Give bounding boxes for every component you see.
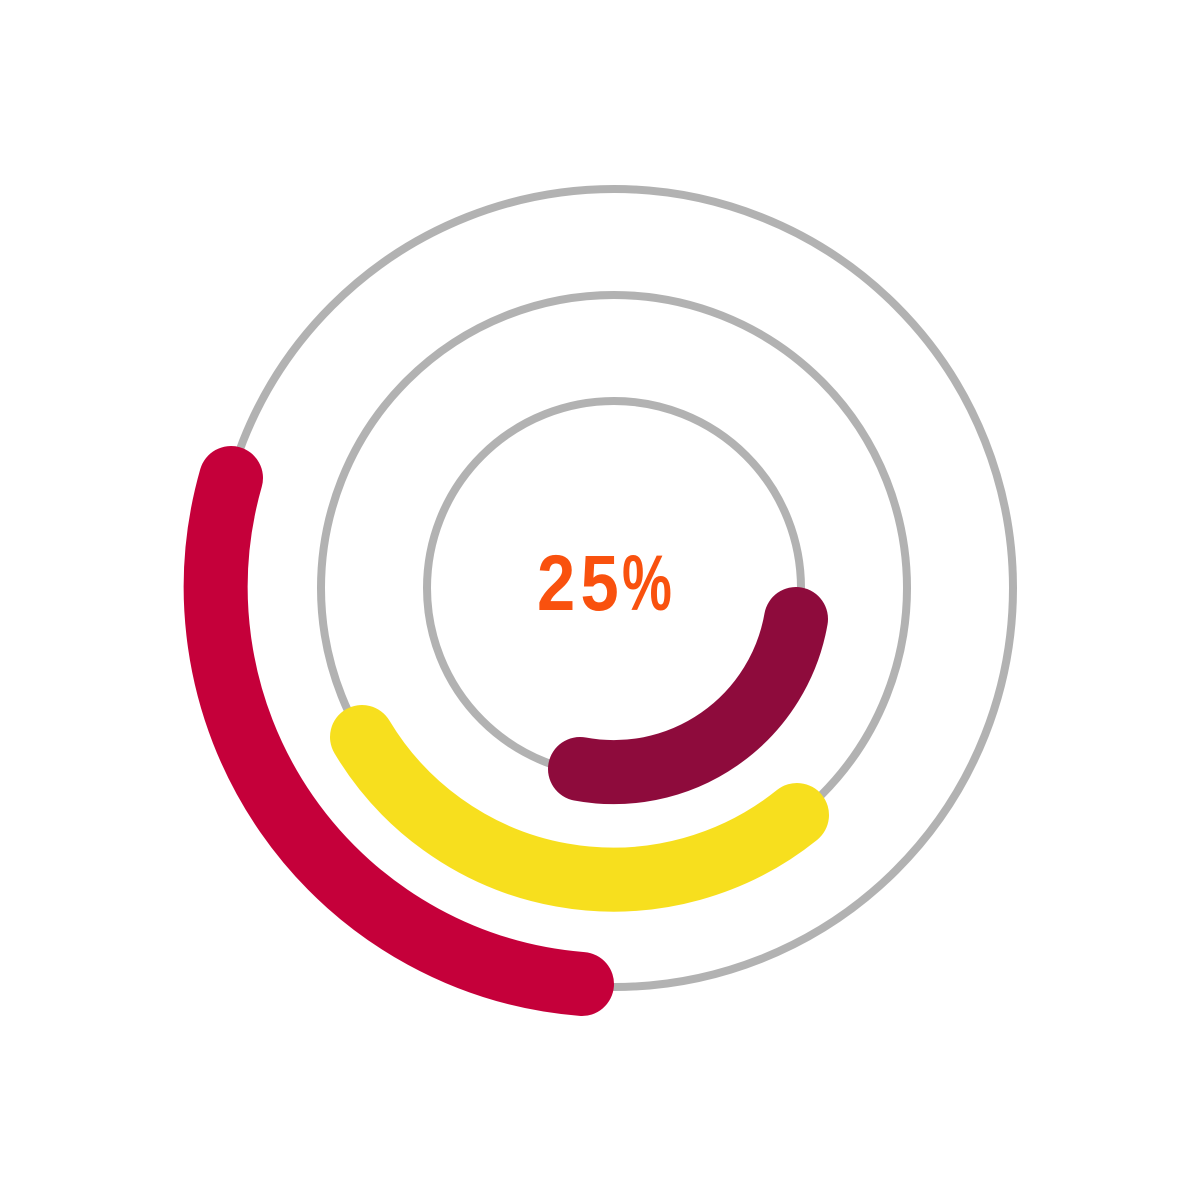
yellow arc [362, 737, 797, 880]
inner grey ring [427, 401, 801, 775]
middle grey ring [321, 295, 907, 881]
percentage label [537, 539, 672, 627]
maroon arc [580, 619, 796, 772]
red arc [216, 478, 582, 984]
percentage label: 5 [580, 539, 619, 627]
percentage label: % [622, 539, 672, 627]
outer grey ring [215, 189, 1013, 987]
percentage label: 2 [537, 539, 575, 627]
